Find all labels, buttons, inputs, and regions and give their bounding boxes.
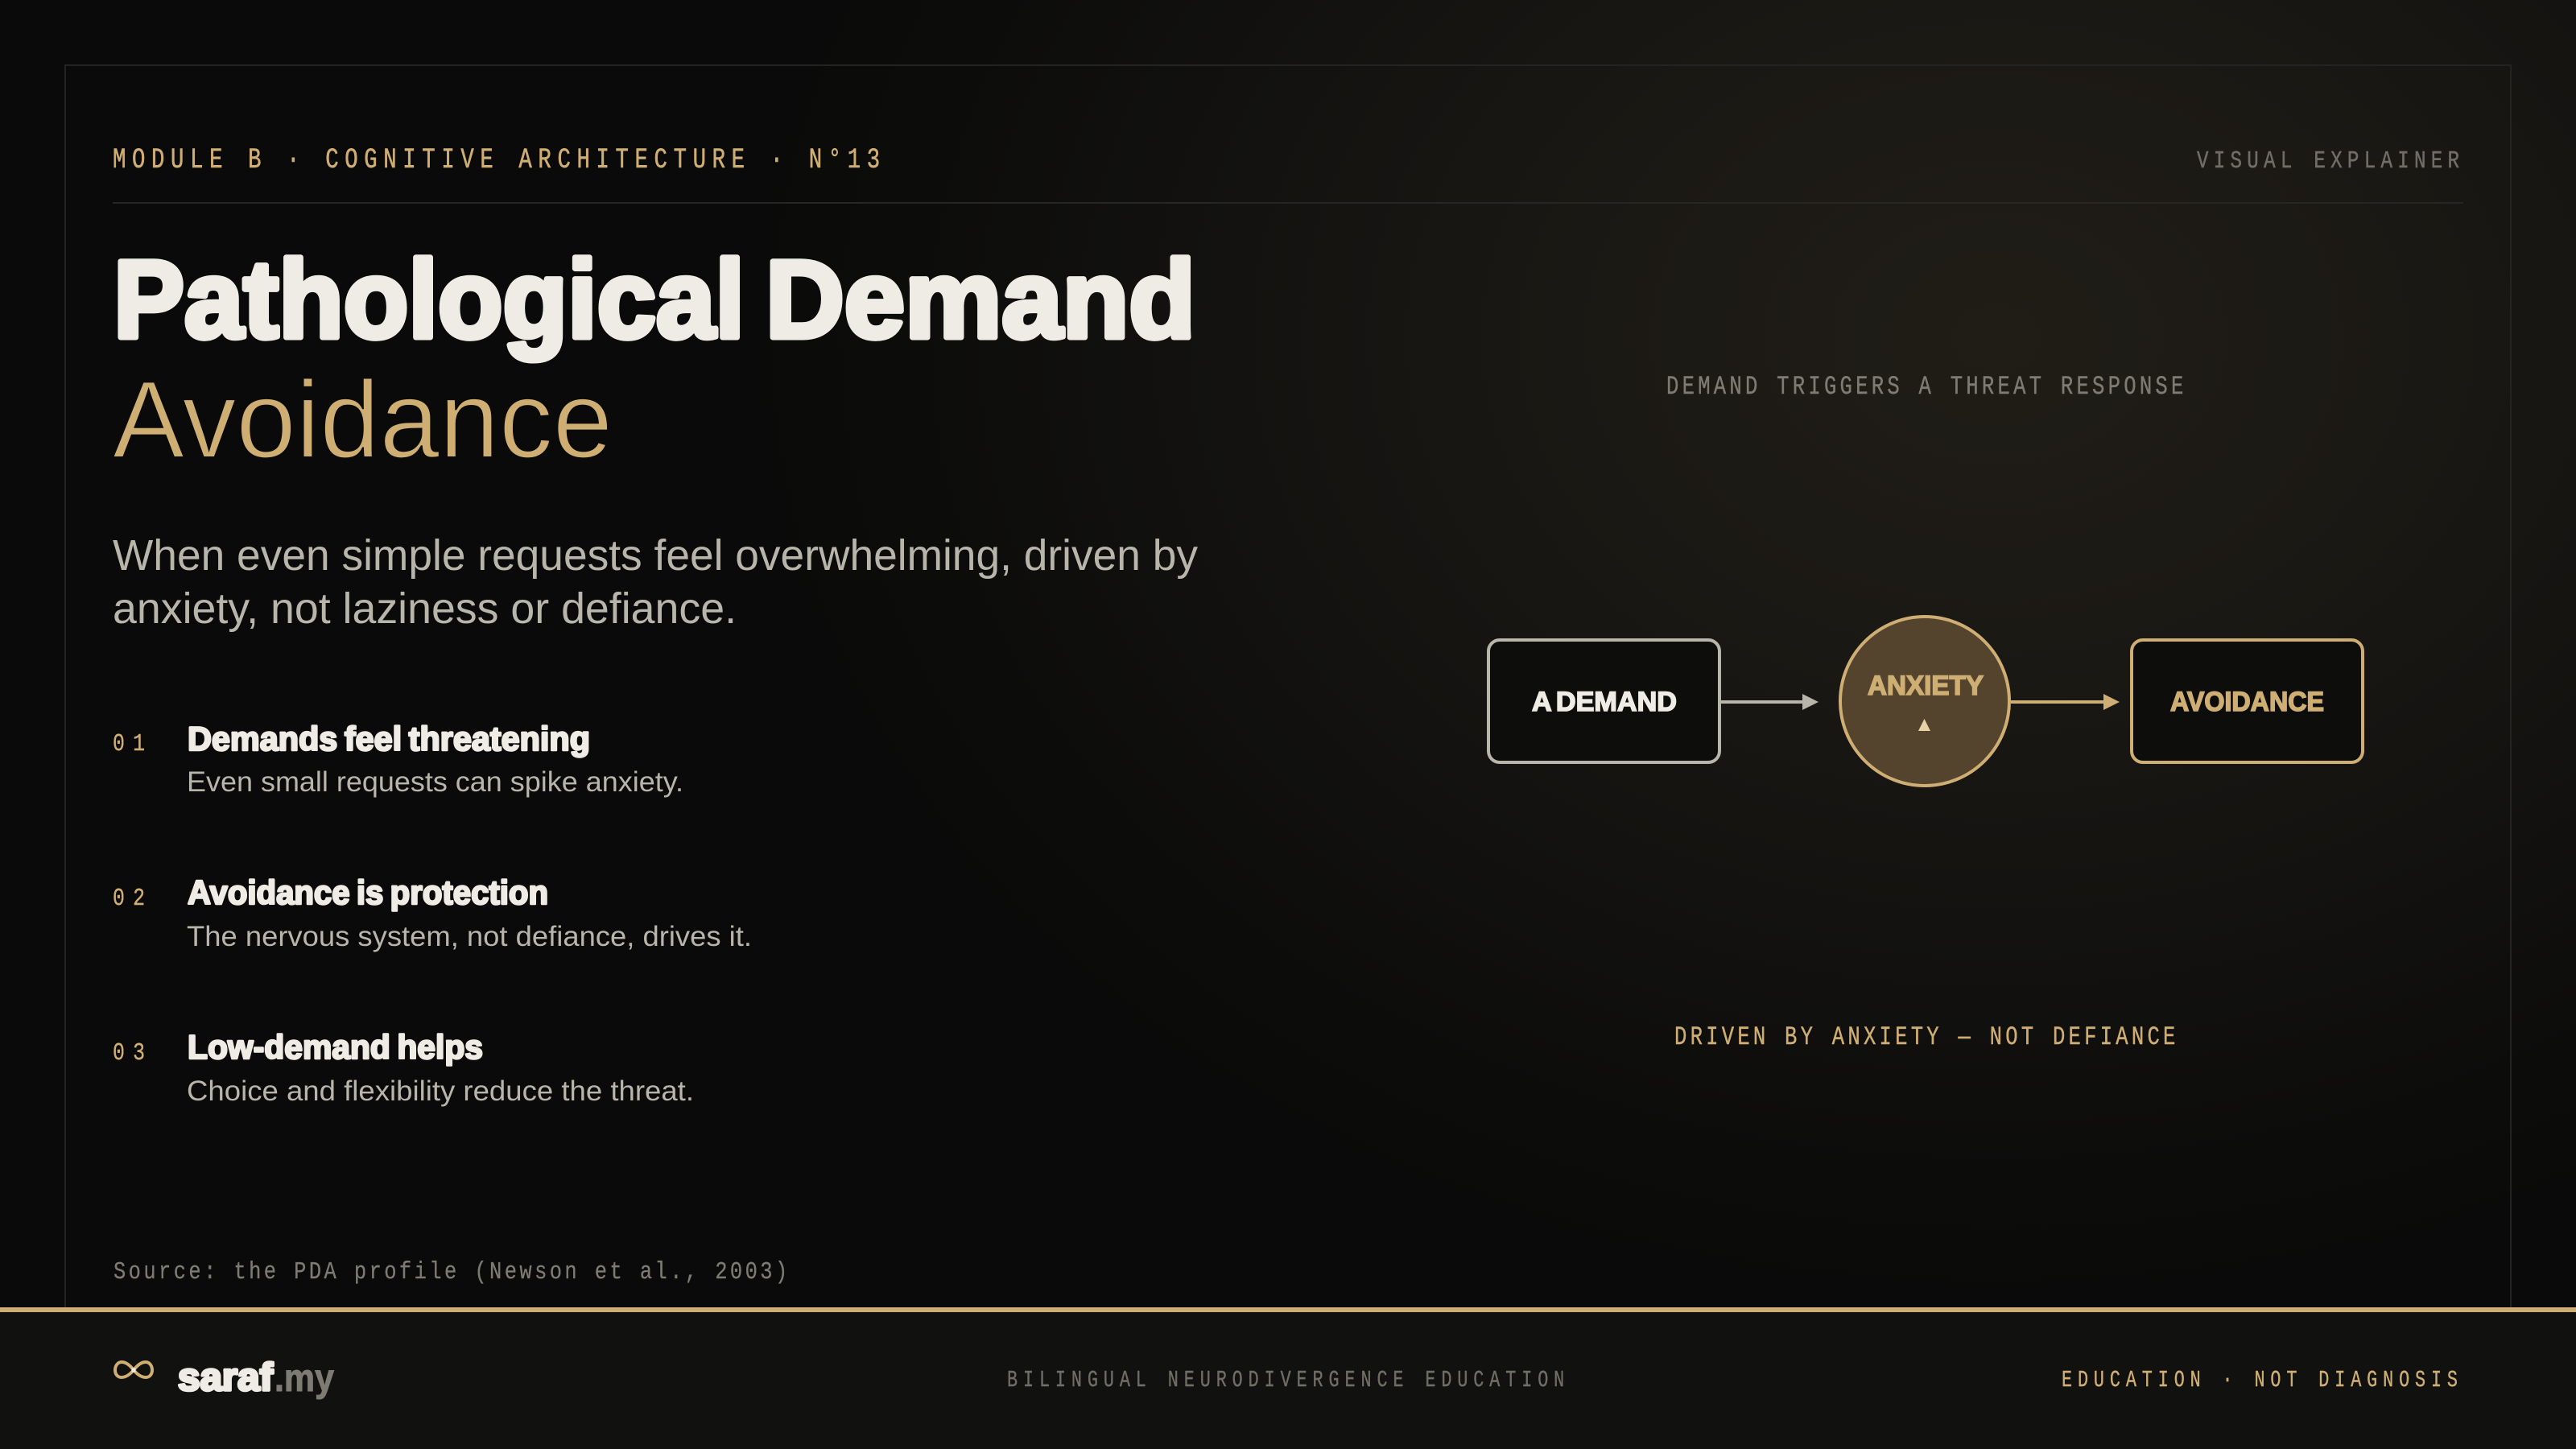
list item 3 (113, 1028, 694, 1107)
list item 2: Avoidance is protection (188, 873, 548, 911)
subtitle (113, 531, 1198, 633)
footer center text: BILINGUAL NEURODIVERGENCE EDUCATION (1007, 1367, 1564, 1393)
list item 3: 03 (113, 1040, 145, 1067)
diagram caption top: DEMAND TRIGGERS A THREAT RESPONSE (1666, 372, 2183, 402)
logo wordmark: saraf (178, 1356, 274, 1399)
diagram caption bottom: DRIVEN BY ANXIETY — NOT DEFIANCE (1674, 1022, 2175, 1052)
list item 2: The nervous system, not defiance, drives it. (187, 921, 752, 952)
list item 1: Even small requests can spike anxiety. (187, 766, 683, 798)
subtitle: anxiety, not laziness or defiance. (113, 584, 737, 633)
list item 3: Choice and flexibility reduce the threat. (187, 1075, 694, 1107)
title (113, 238, 1195, 481)
arrow: anxiety to avoidance (2011, 694, 2120, 710)
source note: Source: the PDA profile (Newson et al., 2003) (114, 1257, 787, 1286)
title line 1: Demand (766, 238, 1195, 361)
list item 1: 01 (113, 731, 145, 758)
arrow: demand to anxiety (1721, 694, 1818, 710)
subtitle: When even simple requests feel overwhelming, driven by (113, 531, 1198, 580)
title line 2: Avoidance (113, 358, 613, 481)
list item 3: Low-demand helps (188, 1028, 483, 1066)
logo wordmark (178, 1356, 334, 1400)
circle: anxiety (1840, 617, 2009, 786)
circle: anxiety: ANXIETY (1868, 671, 1984, 701)
flow diagram (1488, 617, 2363, 786)
list item 1: Demands feel threatening (188, 720, 590, 758)
box: a demand (1488, 640, 1719, 762)
header (113, 145, 2463, 204)
logo wordmark: .my (275, 1357, 334, 1400)
list item 1 (113, 720, 683, 798)
module label: MODULE B · COGNITIVE ARCHITECTURE · N°13 (113, 145, 880, 176)
box: avoidance (2132, 640, 2363, 762)
icon: infinity (115, 1362, 152, 1377)
box: avoidance: AVOIDANCE (2170, 687, 2324, 717)
box: a demand: A DEMAND (1532, 687, 1677, 717)
footer (0, 1307, 2576, 1449)
visual explainer label: VISUAL EXPLAINER (2197, 147, 2459, 175)
title line 1 (114, 238, 1195, 361)
footer right text: EDUCATION · NOT DIAGNOSIS (2062, 1367, 2458, 1393)
title line 1: Pathological (114, 238, 745, 361)
list item 2 (113, 873, 752, 952)
list item 2: 02 (113, 886, 145, 913)
